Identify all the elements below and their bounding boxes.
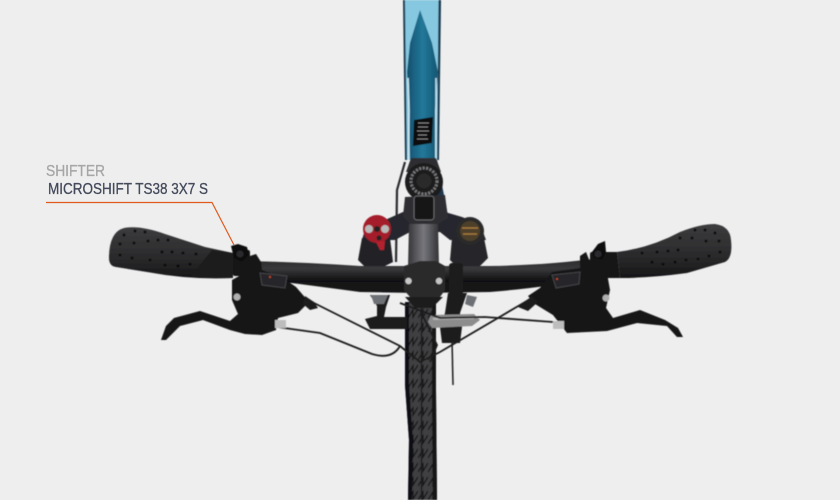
cables: [277, 296, 553, 385]
headlight reflector: [428, 314, 480, 328]
left grip: [109, 227, 233, 278]
label: component model: MICROSHIFT TS38 3X7 S: [48, 181, 208, 198]
left fork leg: [358, 238, 393, 266]
caliper and brake hardware: [365, 293, 477, 343]
right fork leg: [450, 238, 488, 266]
frame sticker: [413, 117, 433, 146]
label: component category: SHIFTER: [46, 163, 105, 180]
suspension crown arms: [362, 212, 486, 240]
headset top cap: [405, 158, 443, 201]
right head tube edge: [428, 160, 449, 222]
handlebar: [245, 258, 600, 293]
left fork brace and cable: [396, 162, 405, 262]
bicycle photo: [109, 0, 731, 500]
right grip: [606, 224, 731, 278]
callout leader line: [46, 202, 234, 245]
front tire: [405, 302, 437, 500]
stem clamp: [404, 261, 463, 308]
red lockout knob: [363, 215, 391, 250]
right shifter and brake lever: [518, 241, 683, 337]
frame top tube: [403, 0, 441, 160]
left shifter and brake lever: [161, 244, 318, 340]
stem: [403, 195, 448, 268]
gold adjuster knob: [456, 217, 484, 245]
